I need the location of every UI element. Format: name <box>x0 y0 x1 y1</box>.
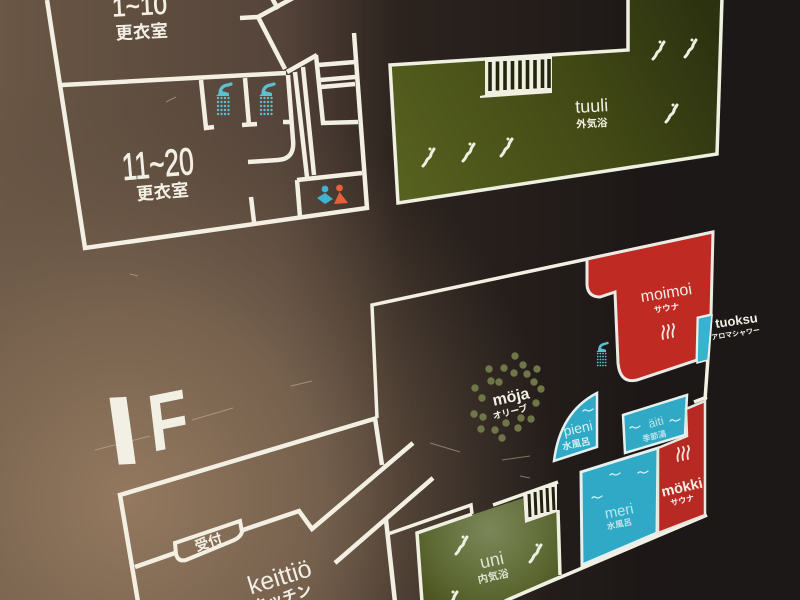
icons: meri water <box>592 471 648 498</box>
label: lockers 11~20: 11~20 <box>120 141 196 189</box>
uni label <box>476 548 511 586</box>
icon: moimoi heat <box>662 324 674 339</box>
moimoi label: サウナ <box>653 301 680 315</box>
icon: mökki heat <box>678 446 689 461</box>
mökki area <box>658 401 705 533</box>
tuoksu label <box>711 310 761 342</box>
pieni area <box>554 393 597 461</box>
panel: pieni cold bath <box>554 393 597 461</box>
aiti label: 季節湯 <box>641 428 667 444</box>
floor plan: ground floor walls <box>120 232 714 600</box>
tuuli label: tuuli <box>575 95 609 117</box>
panel: aiti seasonal bath <box>623 395 687 453</box>
panel: tuuli outdoor bath <box>390 0 722 203</box>
icons: aiti water <box>630 419 680 428</box>
uni label: uni <box>478 548 506 572</box>
meri label: 水風呂 <box>606 517 633 532</box>
meri area <box>581 448 658 565</box>
panel: moimoi sauna <box>587 232 713 381</box>
tuuli label <box>575 95 609 131</box>
tuoksu label: tuoksu <box>714 310 759 331</box>
floor plan: upper level locker rooms <box>47 0 367 248</box>
locker room walls <box>47 0 367 248</box>
icon: shower right <box>259 84 274 115</box>
tuuli stairs <box>480 56 552 98</box>
mökki label: サウナ <box>670 493 695 508</box>
olive dots <box>470 352 545 442</box>
icon: bather group <box>423 38 696 166</box>
panel: meri cold bath <box>581 448 658 565</box>
floor marker: 1F: F <box>143 372 193 469</box>
tuuli area <box>390 0 722 203</box>
icons: uni bathers <box>446 536 541 600</box>
tuoksu label: アロマシャワー <box>711 326 761 342</box>
panel: uni indoor bath <box>417 482 560 600</box>
label: lockers 11~20: 更衣室 <box>135 180 189 204</box>
reception desk <box>175 521 242 560</box>
floor marker: 1F: I <box>99 375 146 486</box>
moimoi label: moimoi <box>640 281 693 306</box>
panel: mökki sauna <box>658 401 705 533</box>
icon: restroom <box>317 185 348 204</box>
aiti label: äiti <box>647 413 665 431</box>
label: lockers 1~10 <box>111 0 168 43</box>
uni area <box>417 498 559 600</box>
pieni label: pieni <box>562 417 594 439</box>
icon: pieni water <box>583 409 593 411</box>
reception desk: 受付 <box>193 530 224 554</box>
label: lockers 1~10: 更衣室 <box>115 21 168 43</box>
tuuli label: 外気浴 <box>576 116 608 131</box>
möja label: オリーブ <box>492 402 529 421</box>
aiti area <box>623 395 687 453</box>
icon: shower left <box>216 84 231 115</box>
icon: shower <box>596 343 608 366</box>
uni stairs <box>523 483 557 523</box>
floor marker: 1F <box>99 372 193 486</box>
panel: möja olive <box>470 352 545 442</box>
pieni label <box>561 417 594 453</box>
möja label <box>491 385 531 421</box>
uni outline <box>417 482 560 600</box>
mökki label: mökki <box>660 476 704 501</box>
aiti label <box>641 413 667 444</box>
panel: tuoksu aroma shower <box>697 310 761 363</box>
pieni label: 水風呂 <box>561 435 592 453</box>
tuoksu area <box>697 315 712 363</box>
möja label: möja <box>491 385 531 410</box>
meri label: meri <box>603 500 635 523</box>
right side walls <box>372 232 714 600</box>
moimoi area <box>587 232 713 381</box>
label: lockers 11~20 <box>120 141 196 204</box>
uni label: 内気浴 <box>476 567 511 586</box>
label: keittiö kitchen: keittiö <box>244 554 315 600</box>
